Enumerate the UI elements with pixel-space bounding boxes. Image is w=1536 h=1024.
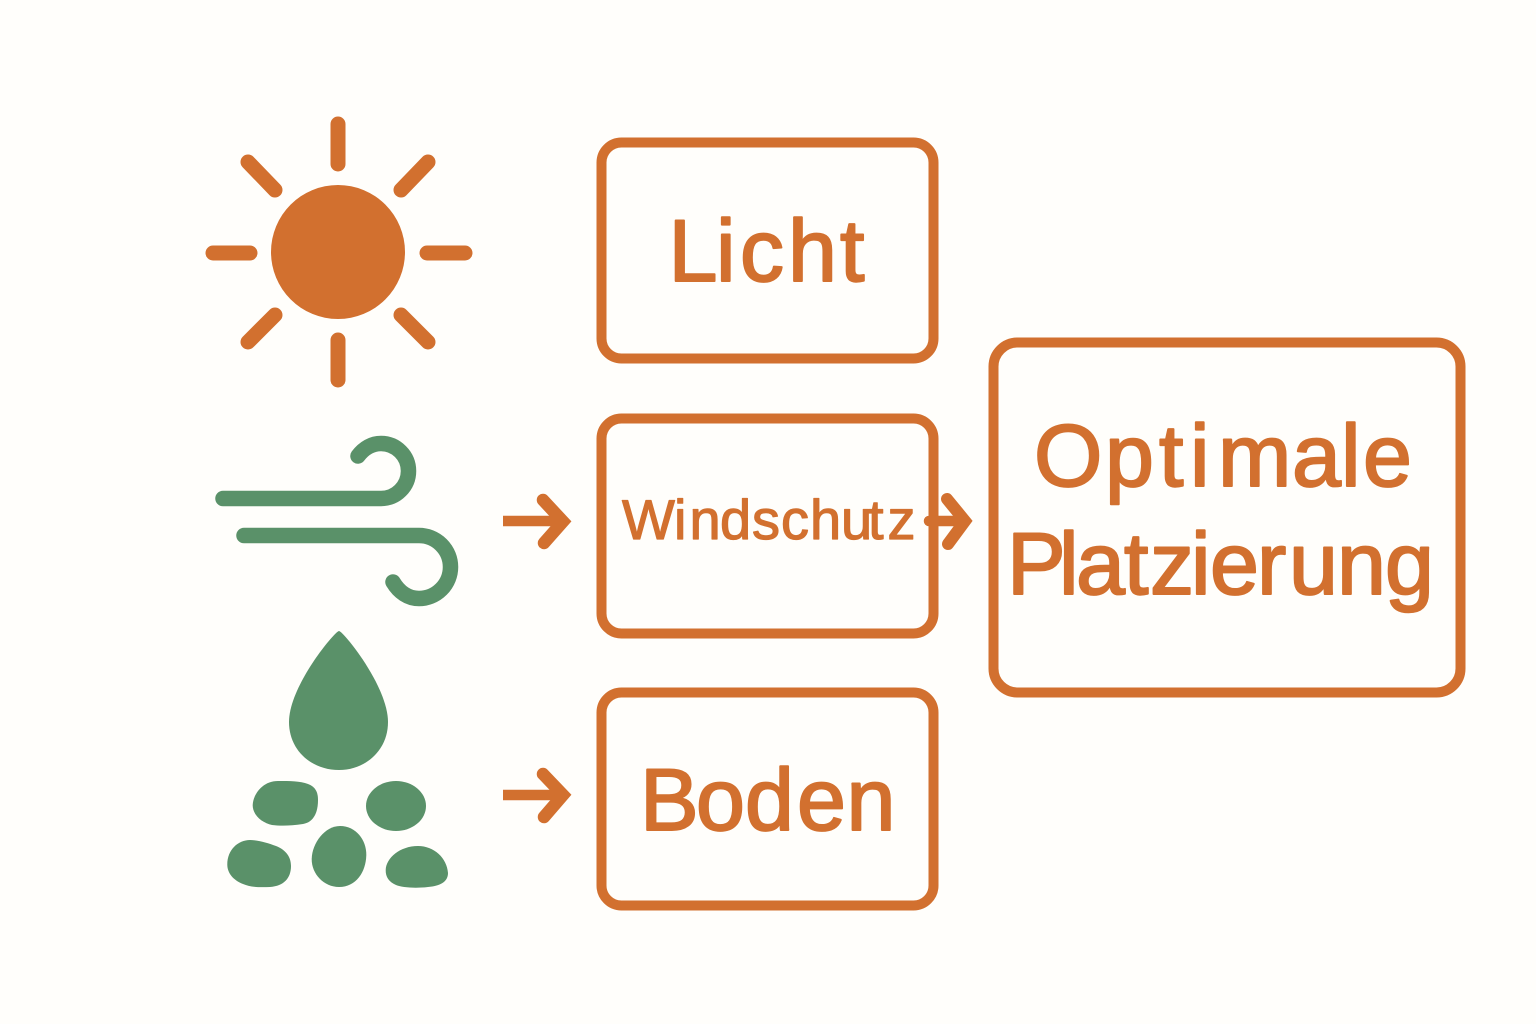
icon: water drop and soil (227, 631, 448, 888)
heading: Optimale: Optimale (1034, 406, 1412, 505)
panel: Licht (602, 142, 934, 358)
arrow: Windschutz to Optimale Platzierung (929, 499, 965, 544)
panel: Boden (602, 692, 934, 906)
heading: Platzierung: Platzierung (1007, 514, 1434, 613)
arrow: soil to Boden (503, 774, 563, 817)
icon: wind (223, 444, 451, 598)
panel: Optimale Platzierung (994, 342, 1460, 692)
panel: Windschutz (602, 418, 934, 634)
icon: sun (213, 124, 465, 380)
heading: Licht: Licht (668, 201, 864, 300)
heading: Boden: Boden (640, 750, 895, 849)
heading: Windschutz: Windschutz (622, 488, 916, 551)
arrow: wind to Windschutz (503, 500, 563, 543)
